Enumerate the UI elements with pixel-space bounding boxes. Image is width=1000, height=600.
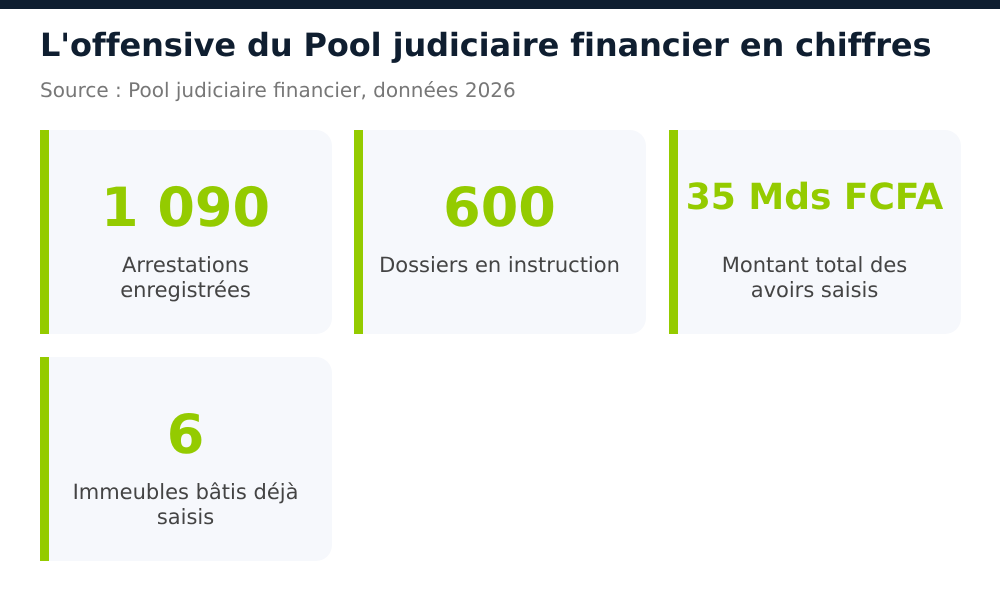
panel: immeubles [40, 357, 332, 561]
top bar [0, 0, 1000, 9]
number: 6: 6 [167, 403, 204, 466]
label: avoirs [722, 253, 907, 302]
label: arrestations: Arrestations [122, 253, 249, 277]
label: dossiers: Dossiers en instruction [379, 253, 620, 277]
panel: avoirs saisis [669, 130, 961, 334]
panel: arrestations [40, 130, 332, 334]
number: 1 090: 1 090 [101, 176, 270, 239]
label: immeubles: saisis [157, 505, 214, 529]
label: immeubles [73, 480, 298, 529]
title: L'offensive du Pool judiciaire financier en chiffres [40, 26, 931, 64]
panel: dossiers [354, 130, 646, 334]
label: arrestations: enregistrées [120, 278, 251, 302]
source line: Source : Pool judiciaire financier, données 2026 [40, 78, 516, 102]
label: immeubles: Immeubles bâtis déjà [73, 480, 298, 504]
label: avoirs: avoirs saisis [751, 278, 878, 302]
number: 35 Mds FCFA: 35 Mds FCFA [686, 177, 943, 218]
label: avoirs: Montant total des [722, 253, 907, 277]
label: arrestations [120, 253, 251, 302]
number: 600: 600 [443, 176, 556, 239]
